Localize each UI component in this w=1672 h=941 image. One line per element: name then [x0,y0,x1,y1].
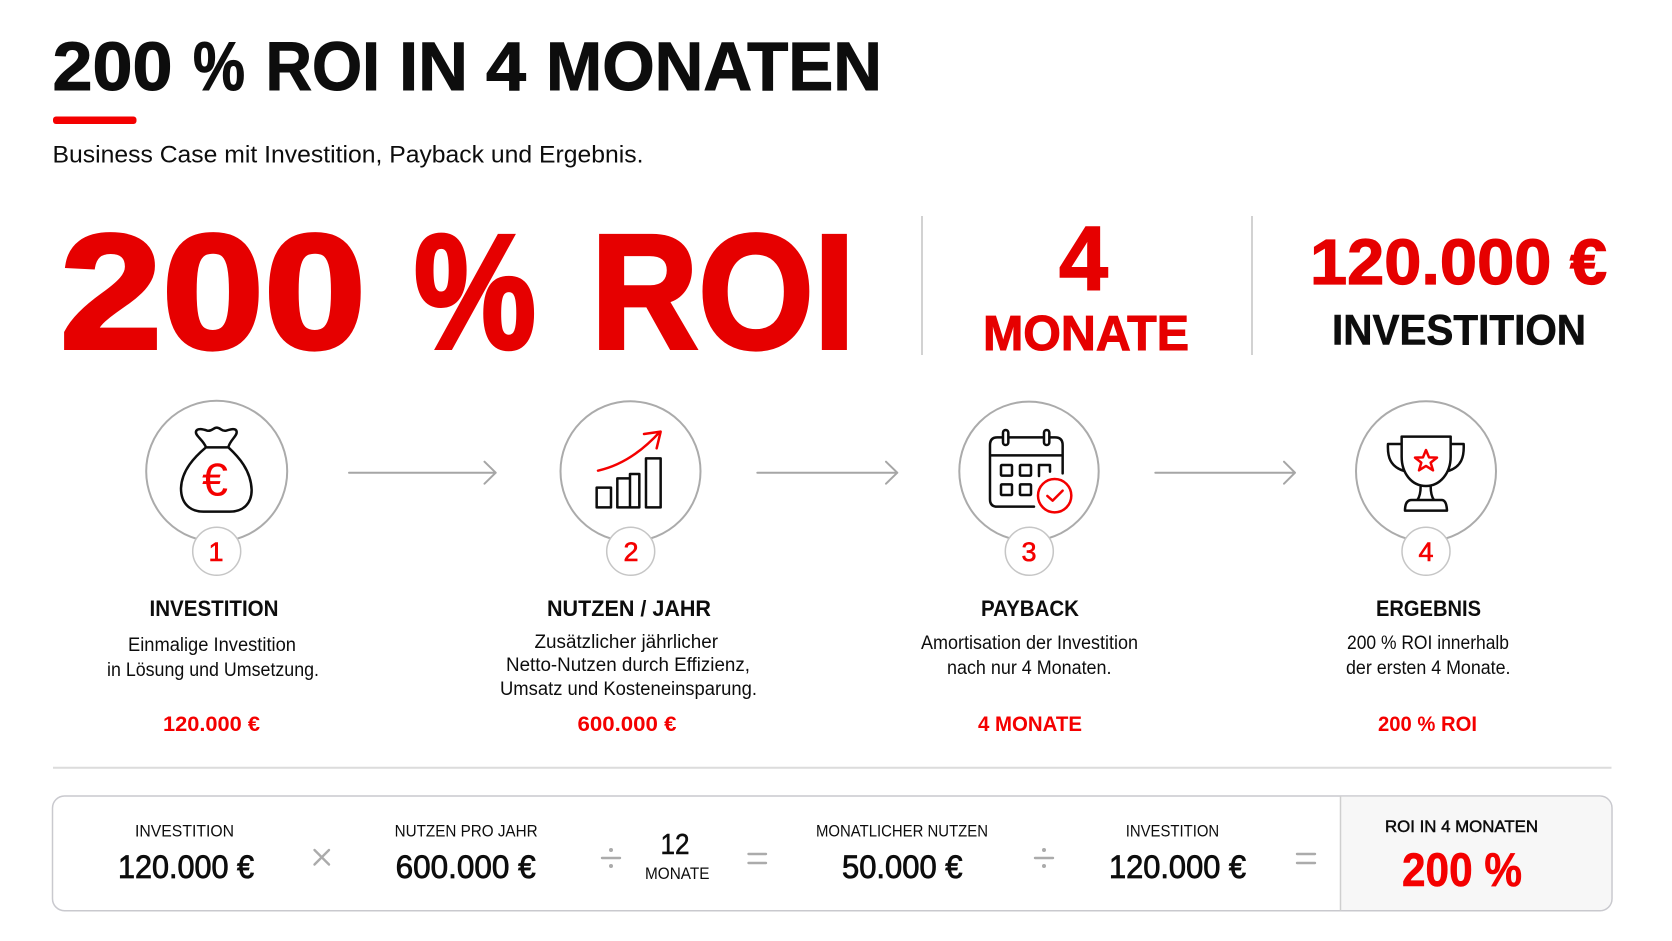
KPI: 200 % ROI: ROI [591,200,855,383]
result: ROI in 4 Monaten: 200 % [1402,843,1522,896]
formula: Investition [1109,822,1246,885]
icon: calendar with check [990,430,1071,512]
heading 1: INVESTITION [150,596,278,621]
title: IN [399,28,468,105]
KPI: 120.000 € Investition: INVESTITION [1332,306,1586,354]
result cell background [1340,797,1611,910]
KPI: 200 % ROI: 200 [60,200,366,383]
description 4: 200 % ROI innerhalb [1347,633,1509,654]
step 1: Investition [107,401,319,736]
icon: money bag: € [202,454,228,506]
title: ROI [266,28,380,105]
formula: 12 Monate: MONATE [645,864,710,883]
formula: Investition: INVESTITION [1126,822,1219,841]
title [52,28,882,105]
formula: Investition: 120.000 € [118,849,254,885]
formula: Investition: 120.000 € [1109,849,1246,885]
icon: money bag [181,428,252,512]
description 1: Einmalige Investition [128,635,296,656]
description 2: Zusätzlicher jährlicher [534,632,719,653]
operator: equals [748,854,766,863]
icon circle 4 [1356,401,1496,541]
title accent bar [53,116,136,124]
number badge 2 [607,527,655,575]
KPI: 200 % ROI: % [414,200,536,383]
formula: Investition [118,822,254,885]
heading 2: NUTZEN / JAHR [547,596,711,621]
number badge 3: 3 [1021,537,1037,567]
description 2: Umsatz und Kosteneinsparung. [500,679,757,700]
icon circle 2 [560,401,700,541]
operator: equals [1297,854,1315,863]
KPI: 120.000 € Investition: 120.000 € [1310,226,1607,298]
icon circle 3 [959,402,1099,541]
description 4 [1346,633,1510,679]
icon circle 1 [146,401,287,542]
formula: Investition: INVESTITION [135,822,234,841]
description 1 [107,635,319,681]
operator: times [314,850,329,864]
formula: Nutzen pro Jahr: NUTZEN PRO JAHR [395,822,538,841]
KPI: 4 Monate: 4 [1059,209,1108,310]
value 1: 120.000 € [163,713,260,736]
arrow 1 to 2 [349,462,496,484]
step 3: Payback [921,402,1138,736]
title: 4 [486,28,526,105]
description 3: Amortisation der Investition [921,633,1138,654]
description 3: nach nur 4 Monaten. [947,658,1112,679]
heading 3: PAYBACK [981,596,1079,621]
formula: Nutzen pro Jahr [395,822,538,885]
description 1: in Lösung und Umsetzung. [107,660,319,681]
KPI: 4 Monate [983,209,1189,361]
formula: Monatlicher Nutzen [816,822,988,885]
heading 4: ERGEBNIS [1376,596,1481,621]
description 2: Netto-Nutzen durch Effizienz, [506,655,750,676]
title: MONATEN [546,28,882,105]
operator: divide [602,848,620,868]
description 2 [500,632,757,700]
icon: bar chart with arrow [597,432,661,507]
operator: divide [1035,848,1053,868]
formula: 12 Monate: 12 [660,829,690,861]
KPI: 4 Monate: MONATE [983,307,1189,361]
arrow 2 to 3 [757,462,897,484]
result: ROI in 4 Monaten: ROI IN 4 MONATEN [1385,817,1538,836]
title: % [193,28,245,105]
number badge 1: 1 [208,537,224,567]
number badge 1 [193,527,241,575]
description 3 [921,633,1138,679]
formula: Monatlicher Nutzen: 50.000 € [842,849,963,885]
formula: Monatlicher Nutzen: MONATLICHER NUTZEN [816,822,988,841]
title: 200 [52,28,172,105]
result: ROI in 4 Monaten [1385,817,1538,896]
formula: 12 Monate [645,829,710,883]
step 4: Ergebnis [1346,401,1510,736]
value 4: 200 % ROI [1378,713,1477,736]
number badge 3 [1005,527,1053,575]
subtitle: Business Case mit Investition, Payback und Ergebnis. [52,142,643,168]
number badge 4 [1402,527,1450,575]
arrow 3 to 4 [1155,462,1295,484]
formula: Nutzen pro Jahr: 600.000 € [396,849,536,885]
step 2: Nutzen / Jahr [500,401,757,736]
KPI: 120.000 € Investition [1310,226,1607,354]
description 4: der ersten 4 Monate. [1346,658,1510,679]
number badge 4: 4 [1418,537,1434,567]
icon: trophy with star [1388,437,1464,511]
number badge 2: 2 [623,537,639,567]
value 3: 4 MONATE [978,713,1082,736]
panel: ROI formula [52,796,1612,911]
KPI: 200 % ROI [60,200,855,383]
value 2: 600.000 € [578,713,677,736]
